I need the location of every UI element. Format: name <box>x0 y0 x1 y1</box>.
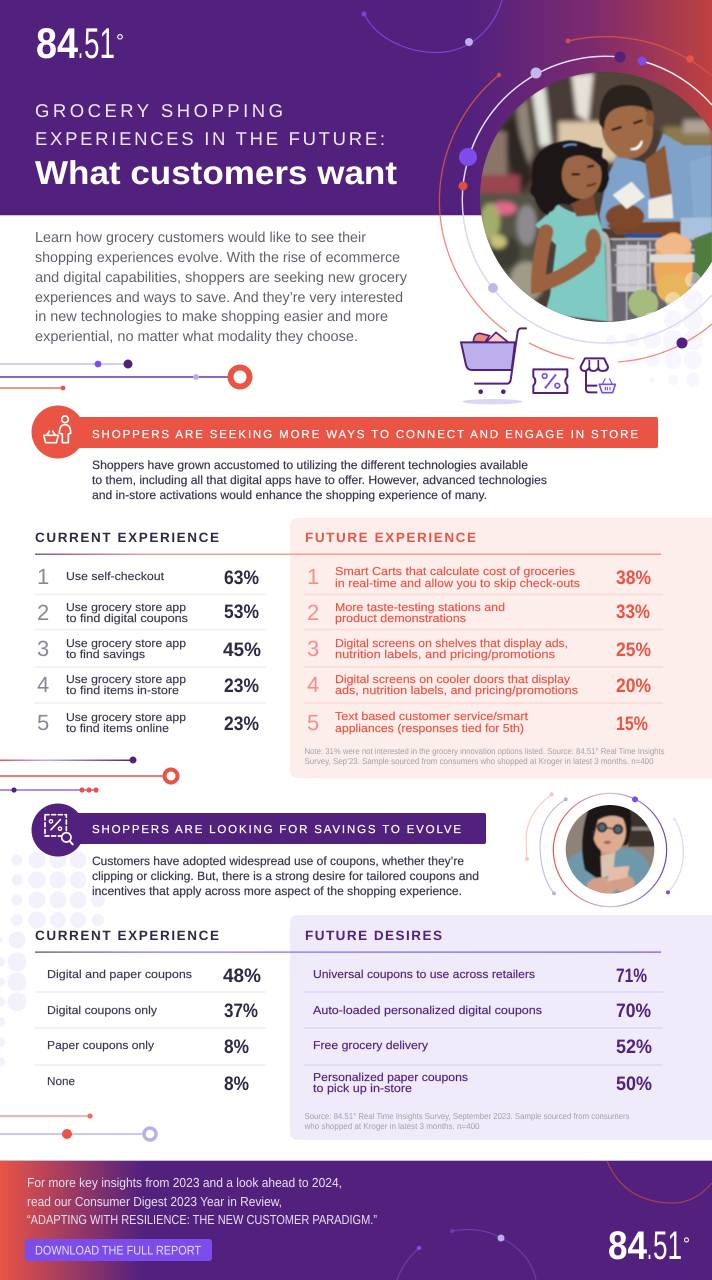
table: future experience in store: product demonstrations <box>335 613 466 625</box>
table: current experience in store: 53% <box>224 601 259 623</box>
table: current coupon use: 37% <box>224 1000 258 1022</box>
table: current experience in store: Use grocery store app <box>66 674 186 686</box>
header band <box>0 0 712 215</box>
table: future experience in store: 3 <box>307 636 319 661</box>
intro paragraph: experiential, no matter what modality they choose. <box>35 329 358 345</box>
logo <box>36 20 124 68</box>
table: current experience in store: to find savings <box>66 649 145 661</box>
table: future experience in store: 15% <box>616 713 648 735</box>
footnote: in store source: Survey, Sep’23. Sample sourced from consumers who shopped at Kroger in latest 3 months. n=400 <box>304 756 654 766</box>
photo: mother and daughter shopping <box>470 65 712 330</box>
logo: ° <box>116 31 124 53</box>
table: current experience in store: Use grocery store app <box>66 712 186 724</box>
table: current experience in store: 4 <box>37 672 49 697</box>
table: current coupon use: 8% <box>224 1036 249 1058</box>
footer logo: 51 <box>653 1224 682 1268</box>
table: current coupon use: Digital coupons only <box>47 1005 157 1017</box>
intro paragraph: and digital capabilities, shoppers are seeking new grocery <box>35 270 408 286</box>
heading rule: savings tables <box>35 952 661 953</box>
table: current coupon use: None <box>47 1076 75 1088</box>
decorative dot pattern near photo <box>606 290 703 387</box>
table: current experience in store: Use grocery store app <box>66 602 186 614</box>
table: future desires: to pick up in-store <box>313 1083 412 1095</box>
download button: DOWNLOAD THE FULL REPORT <box>35 1244 201 1258</box>
section description: savings <box>92 854 479 898</box>
table: future desires: Personalized paper coupons <box>313 1072 468 1084</box>
table: future experience in store: nutrition labels, and pricing/promotions <box>335 649 555 661</box>
intro paragraph: Learn how grocery customers would like to see their <box>35 230 366 246</box>
footnote: in store source <box>304 746 664 766</box>
table: future desires: Auto-loaded personalized digital coupons <box>313 1005 542 1017</box>
intro paragraph: experiences and ways to save. And they’re very interested <box>35 290 403 306</box>
table: current coupon use: Digital and paper coupons <box>47 969 192 981</box>
table: future experience in store: More taste-testing stations and <box>335 602 505 614</box>
table: future experience in store: 20% <box>616 675 651 697</box>
footer logo <box>608 1224 690 1268</box>
table: future experience in store: 1 <box>307 564 319 589</box>
footnote: savings source: who shopped at Kroger in latest 3 months. n=400 <box>304 1121 480 1131</box>
heading rule: in store tables <box>35 554 661 555</box>
section description: in store: to them, including all that digital apps have to offer. However, advanced technologies <box>92 473 547 487</box>
table: current experience in store: 5 <box>37 710 49 735</box>
table: current experience in store: 1 <box>37 564 49 589</box>
section heading: savings: SHOPPERS ARE LOOKING FOR SAVINGS TO EVOLVE <box>92 824 461 836</box>
table: current coupon use: 8% <box>224 1073 249 1095</box>
panel: future experience background <box>290 518 712 778</box>
top arc decoration <box>362 0 502 53</box>
footer text: “ADAPTING WITH RESILIENCE: THE NEW CUSTOMER PARADIGM.” <box>27 1212 377 1227</box>
table: future experience in store: Smart Carts that calculate cost of groceries <box>335 566 575 578</box>
table: future desires: Free grocery delivery <box>313 1040 428 1052</box>
intro paragraph: in new technologies to make shopping easier and more <box>35 309 388 325</box>
connector lines: lower <box>0 1113 156 1140</box>
table: future desires: 50% <box>616 1073 652 1095</box>
footer logo: ° <box>683 1234 690 1254</box>
table: future desires: 71% <box>616 965 647 987</box>
table: future experience in store: in real-time and allow you to skip check-outs <box>335 578 580 590</box>
section heading: connect and engage in store <box>32 406 658 458</box>
section description: in store <box>92 458 547 502</box>
table: future experience in store: 5 <box>307 710 319 735</box>
table: future experience in store: 4 <box>307 672 319 697</box>
footer text: read our Consumer Digest 2023 Year in Review, <box>27 1194 282 1209</box>
table: current experience in store: 23% <box>224 713 259 735</box>
table: current coupon use <box>35 928 266 1095</box>
table: current experience in store: to find items in-store <box>66 685 179 697</box>
footer text <box>27 1175 377 1227</box>
title: GROCERY SHOPPING <box>35 100 283 121</box>
translucent dots over photo edge <box>644 272 701 328</box>
table: current coupon use: CURRENT EXPERIENCE <box>35 928 219 943</box>
table: current experience in store: to find items online <box>66 723 169 735</box>
connector lines: middle <box>0 756 178 793</box>
table: current experience in store: 23% <box>224 675 259 697</box>
table: current experience in store <box>35 530 266 735</box>
footnote: savings source <box>304 1111 630 1131</box>
panel: future desires background <box>290 915 712 1140</box>
intro paragraph: shopping experiences evolve. With the rise of ecommerce <box>35 250 400 266</box>
table: current experience in store: 45% <box>223 639 261 661</box>
table: future experience in store: 25% <box>616 639 651 661</box>
cart <box>612 238 712 322</box>
table: current experience in store: 2 <box>37 600 49 625</box>
footer band <box>0 1160 712 1280</box>
table: current experience in store: Use grocery store app <box>66 638 186 650</box>
table: current experience in store: to find digital coupons <box>66 613 188 625</box>
footer text: For more key insights from 2023 and a look ahead to 2024, <box>27 1175 342 1190</box>
intro paragraph <box>35 230 408 345</box>
table: future experience in store: 2 <box>307 600 319 625</box>
logo: 84 <box>36 20 78 68</box>
icon: coupon ticket <box>533 369 567 393</box>
title: What customers want <box>35 154 397 191</box>
table: future desires: 52% <box>616 1036 652 1058</box>
section description: savings: Customers have adopted widespread use of coupons, whether they’re <box>92 854 464 868</box>
download button <box>25 1239 212 1261</box>
portrait: woman with phone and rings <box>525 792 683 907</box>
table: current experience in store: CURRENT EXPERIENCE <box>35 530 219 545</box>
table: future experience in store: FUTURE EXPERIENCE <box>305 530 476 545</box>
table: future desires: FUTURE DESIRES <box>305 928 442 943</box>
woman <box>599 133 712 242</box>
icon: coupon magnifier <box>45 815 73 844</box>
table: future experience in store: Digital screens on cooler doors that display <box>335 674 570 686</box>
footer logo: . <box>647 1224 652 1268</box>
title: EXPERIENCES IN THE FUTURE: <box>35 128 385 149</box>
table: future experience in store <box>304 530 663 735</box>
table: current experience in store: 63% <box>224 567 259 589</box>
table: future experience in store: Text based customer service/smart <box>335 711 529 723</box>
section description: in store: and in-store activations would enhance the shopping experience of many. <box>92 488 487 502</box>
table: future desires <box>304 928 663 1095</box>
girl <box>535 204 607 322</box>
section description: savings: clipping or clicking. But, there is a strong desire for tailored coupons and <box>92 869 479 883</box>
logo: . <box>78 20 83 68</box>
table: future desires: Universal coupons to use across retailers <box>313 969 535 981</box>
table: current coupon use: Paper coupons only <box>47 1040 154 1052</box>
section description: in store: Shoppers have grown accustomed to utilizing the different technologies available <box>92 458 528 472</box>
footnote: savings source: Source: 84.51° Real Time Insights Survey, September 2023. Sample sourced from consumers <box>304 1111 630 1121</box>
decorative dot pattern left <box>0 852 105 1067</box>
table: future desires: 70% <box>616 1000 651 1022</box>
table: future experience in store: appliances (responses tied for 5th) <box>335 723 524 735</box>
table: current coupon use: 48% <box>223 965 261 987</box>
title <box>35 100 397 191</box>
section heading: savings <box>32 804 486 856</box>
footer logo: 84 <box>608 1224 648 1268</box>
table: future experience in store: 38% <box>616 567 651 589</box>
logo: 51 <box>84 20 115 68</box>
ring decorations around photo <box>439 37 712 362</box>
icon: shopper with basket <box>44 416 71 443</box>
table: current experience in store: 3 <box>37 636 49 661</box>
icon: shopping cart <box>461 328 526 404</box>
footnote: in store source: Note: 31% were not interested in the grocery innovation options listed. Source: 84.51° Real Time Insights <box>304 746 664 756</box>
icon: mobile storefront with basket <box>581 358 615 393</box>
table: future experience in store: 33% <box>616 601 650 623</box>
table: future experience in store: ads, nutrition labels, and pricing/promotions <box>335 685 578 697</box>
table: future experience in store: Digital screens on shelves that display ads, <box>335 638 568 650</box>
section description: savings: incentives that apply across more aspect of the shopping experience. <box>92 884 462 898</box>
section heading: connect and engage in store: SHOPPERS ARE SEEKING MORE WAYS TO CONNECT AND ENGAGE IN STORE <box>92 429 638 441</box>
connector lines: upper <box>0 360 250 390</box>
table: current experience in store: Use self-checkout <box>66 571 165 583</box>
